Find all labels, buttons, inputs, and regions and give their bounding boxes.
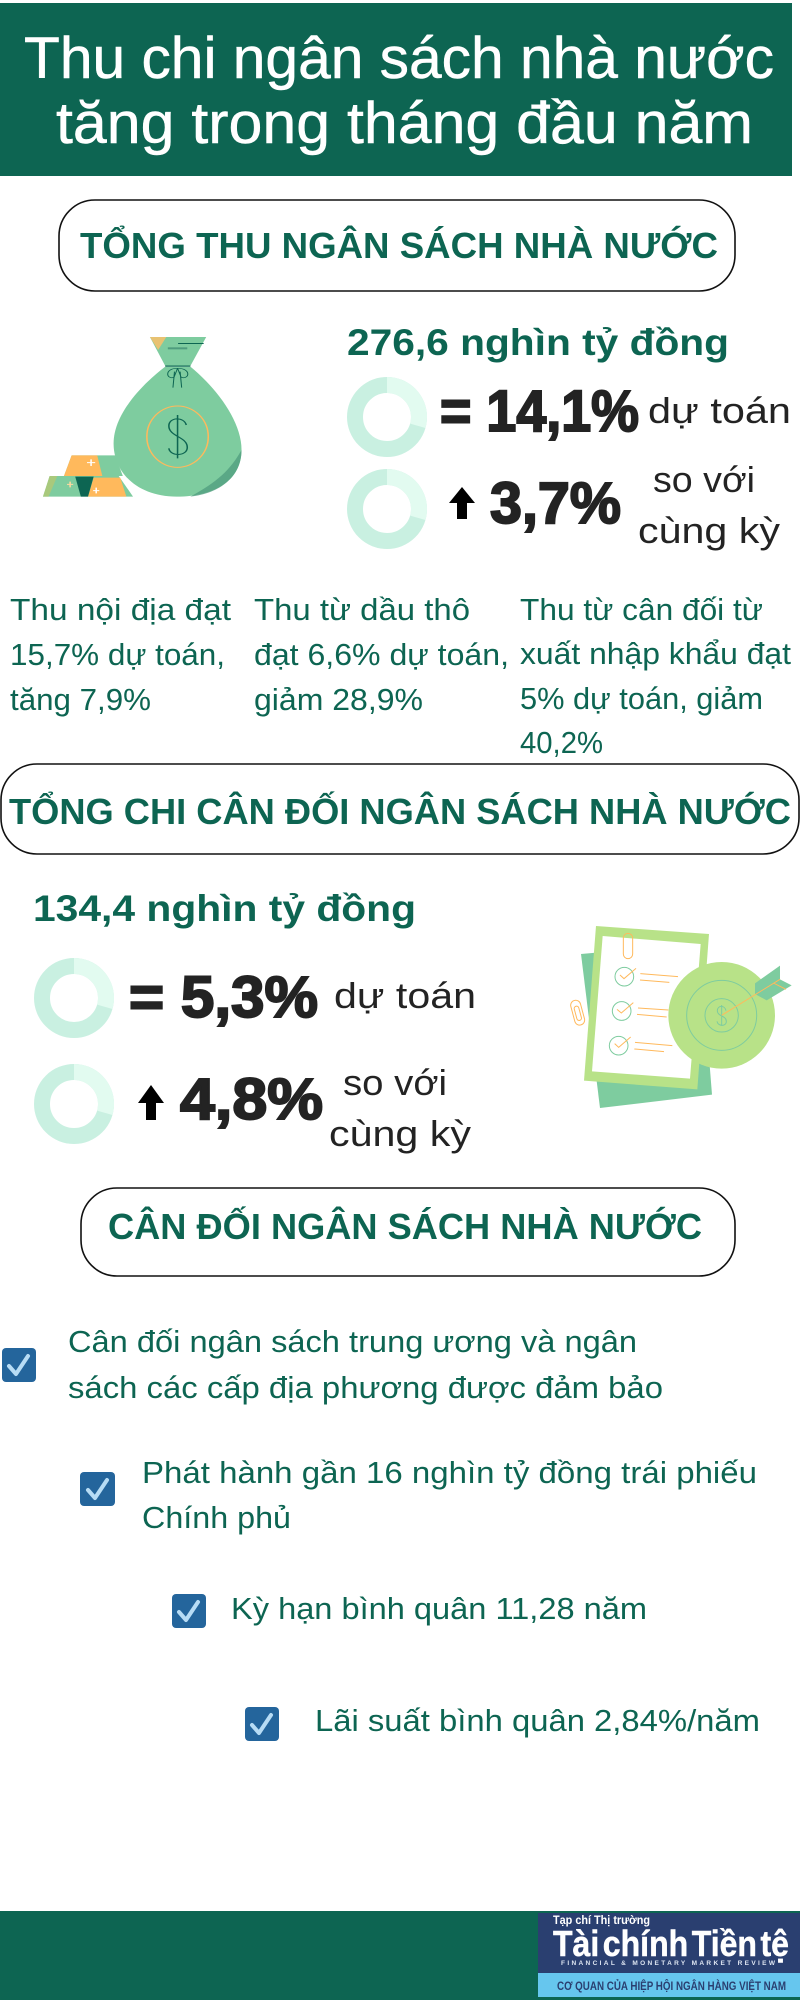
stat: 5.3% of estimate <box>129 965 476 1030</box>
stat: 14.1% of estimate: dự toán <box>648 390 791 431</box>
title banner: Thu chi ngân sách nhà nước <box>24 26 774 91</box>
stat: 14.1% of estimate <box>440 379 791 444</box>
stat: 5.3% of estimate: dự toán <box>334 975 476 1016</box>
heading: total revenue <box>59 200 735 291</box>
donut chart: expenditure vs estimate <box>42 966 106 1030</box>
text: import export revenue: 40,2% <box>520 725 603 760</box>
heading: total expenditure: TỔNG CHI CÂN ĐỐI NGÂN SÁCH NHÀ NƯỚC <box>9 789 791 832</box>
stat: 4.8% year on year: so với <box>343 1062 447 1103</box>
text: domestic revenue: 15,7% dự toán, <box>10 637 225 672</box>
stat: 4.8% year on year: 4,8% <box>180 1067 323 1132</box>
checklist item 4: Lãi suất bình quân 2,84%/năm <box>315 1703 760 1738</box>
text: import export revenue: 5% dự toán, giảm <box>520 681 763 716</box>
icon: checklist and target <box>570 926 792 1108</box>
checklist item 3: Kỳ hạn bình quân 11,28 năm <box>231 1591 647 1626</box>
arrow: revenue up <box>449 487 475 519</box>
stat: 5.3% of estimate: = 5,3% <box>129 965 318 1030</box>
title banner: tăng trong tháng đầu năm <box>56 91 753 156</box>
donut chart: revenue vs estimate <box>355 385 419 449</box>
checklist item 1: sách các cấp địa phương được đảm bảo <box>68 1370 663 1405</box>
text: crude oil revenue: đạt 6,6% dự toán, <box>254 637 509 672</box>
text: import export revenue <box>520 592 791 760</box>
text: crude oil revenue: Thu từ dầu thô <box>254 592 470 627</box>
checklist item 2: Phát hành gần 16 nghìn tỷ đồng trái phiếu <box>142 1455 757 1490</box>
stat: total expenditure value: 134,4 nghìn tỷ đồng <box>33 888 416 929</box>
stat: total revenue value: 276,6 nghìn tỷ đồng <box>347 322 729 363</box>
stat: 3.7% year on year: 3,7% <box>490 471 621 536</box>
text: domestic revenue: Thu nội địa đạt <box>10 592 231 627</box>
text: domestic revenue <box>10 592 231 717</box>
title banner <box>0 3 792 176</box>
heading: budget balance: CÂN ĐỐI NGÂN SÁCH NHÀ NƯỚC <box>108 1205 702 1247</box>
stat: 4.8% year on year <box>180 1062 471 1154</box>
footer band with logo <box>0 1911 800 2000</box>
footer band with logo: Tạp chí Thị trường <box>553 1913 650 1927</box>
checklist item 1 <box>2 1324 663 1405</box>
footer band with logo: FINANCIAL & MONETARY MARKET REVIEW <box>561 1960 776 1967</box>
stat: 3.7% year on year: so với <box>653 459 755 500</box>
donut chart: expenditure year on year <box>42 1072 106 1136</box>
checklist item 1: Cân đối ngân sách trung ương và ngân <box>68 1324 637 1359</box>
text: import export revenue: Thu từ cân đối từ <box>520 592 763 627</box>
text: import export revenue: xuất nhập khẩu đạt <box>520 636 791 671</box>
heading: budget balance <box>81 1188 735 1276</box>
text: domestic revenue: tăng 7,9% <box>10 682 151 717</box>
heading: total revenue: TỔNG THU NGÂN SÁCH NHÀ NƯỚC <box>80 223 718 266</box>
arrow: expenditure up <box>138 1085 164 1120</box>
stat: 14.1% of estimate: = 14,1% <box>440 379 639 444</box>
text: crude oil revenue <box>254 592 509 717</box>
icon: money bag with gold bars <box>43 337 242 497</box>
stat: 4.8% year on year: cùng kỳ <box>329 1113 471 1154</box>
checklist item 2: Chính phủ <box>142 1500 291 1535</box>
stat: 3.7% year on year <box>490 459 780 551</box>
stat: 3.7% year on year: cùng kỳ <box>638 510 780 551</box>
heading: total expenditure <box>1 764 799 854</box>
checklist item 2 <box>80 1455 757 1535</box>
donut chart: revenue year on year <box>355 477 419 541</box>
text: crude oil revenue: giảm 28,9% <box>254 682 423 717</box>
